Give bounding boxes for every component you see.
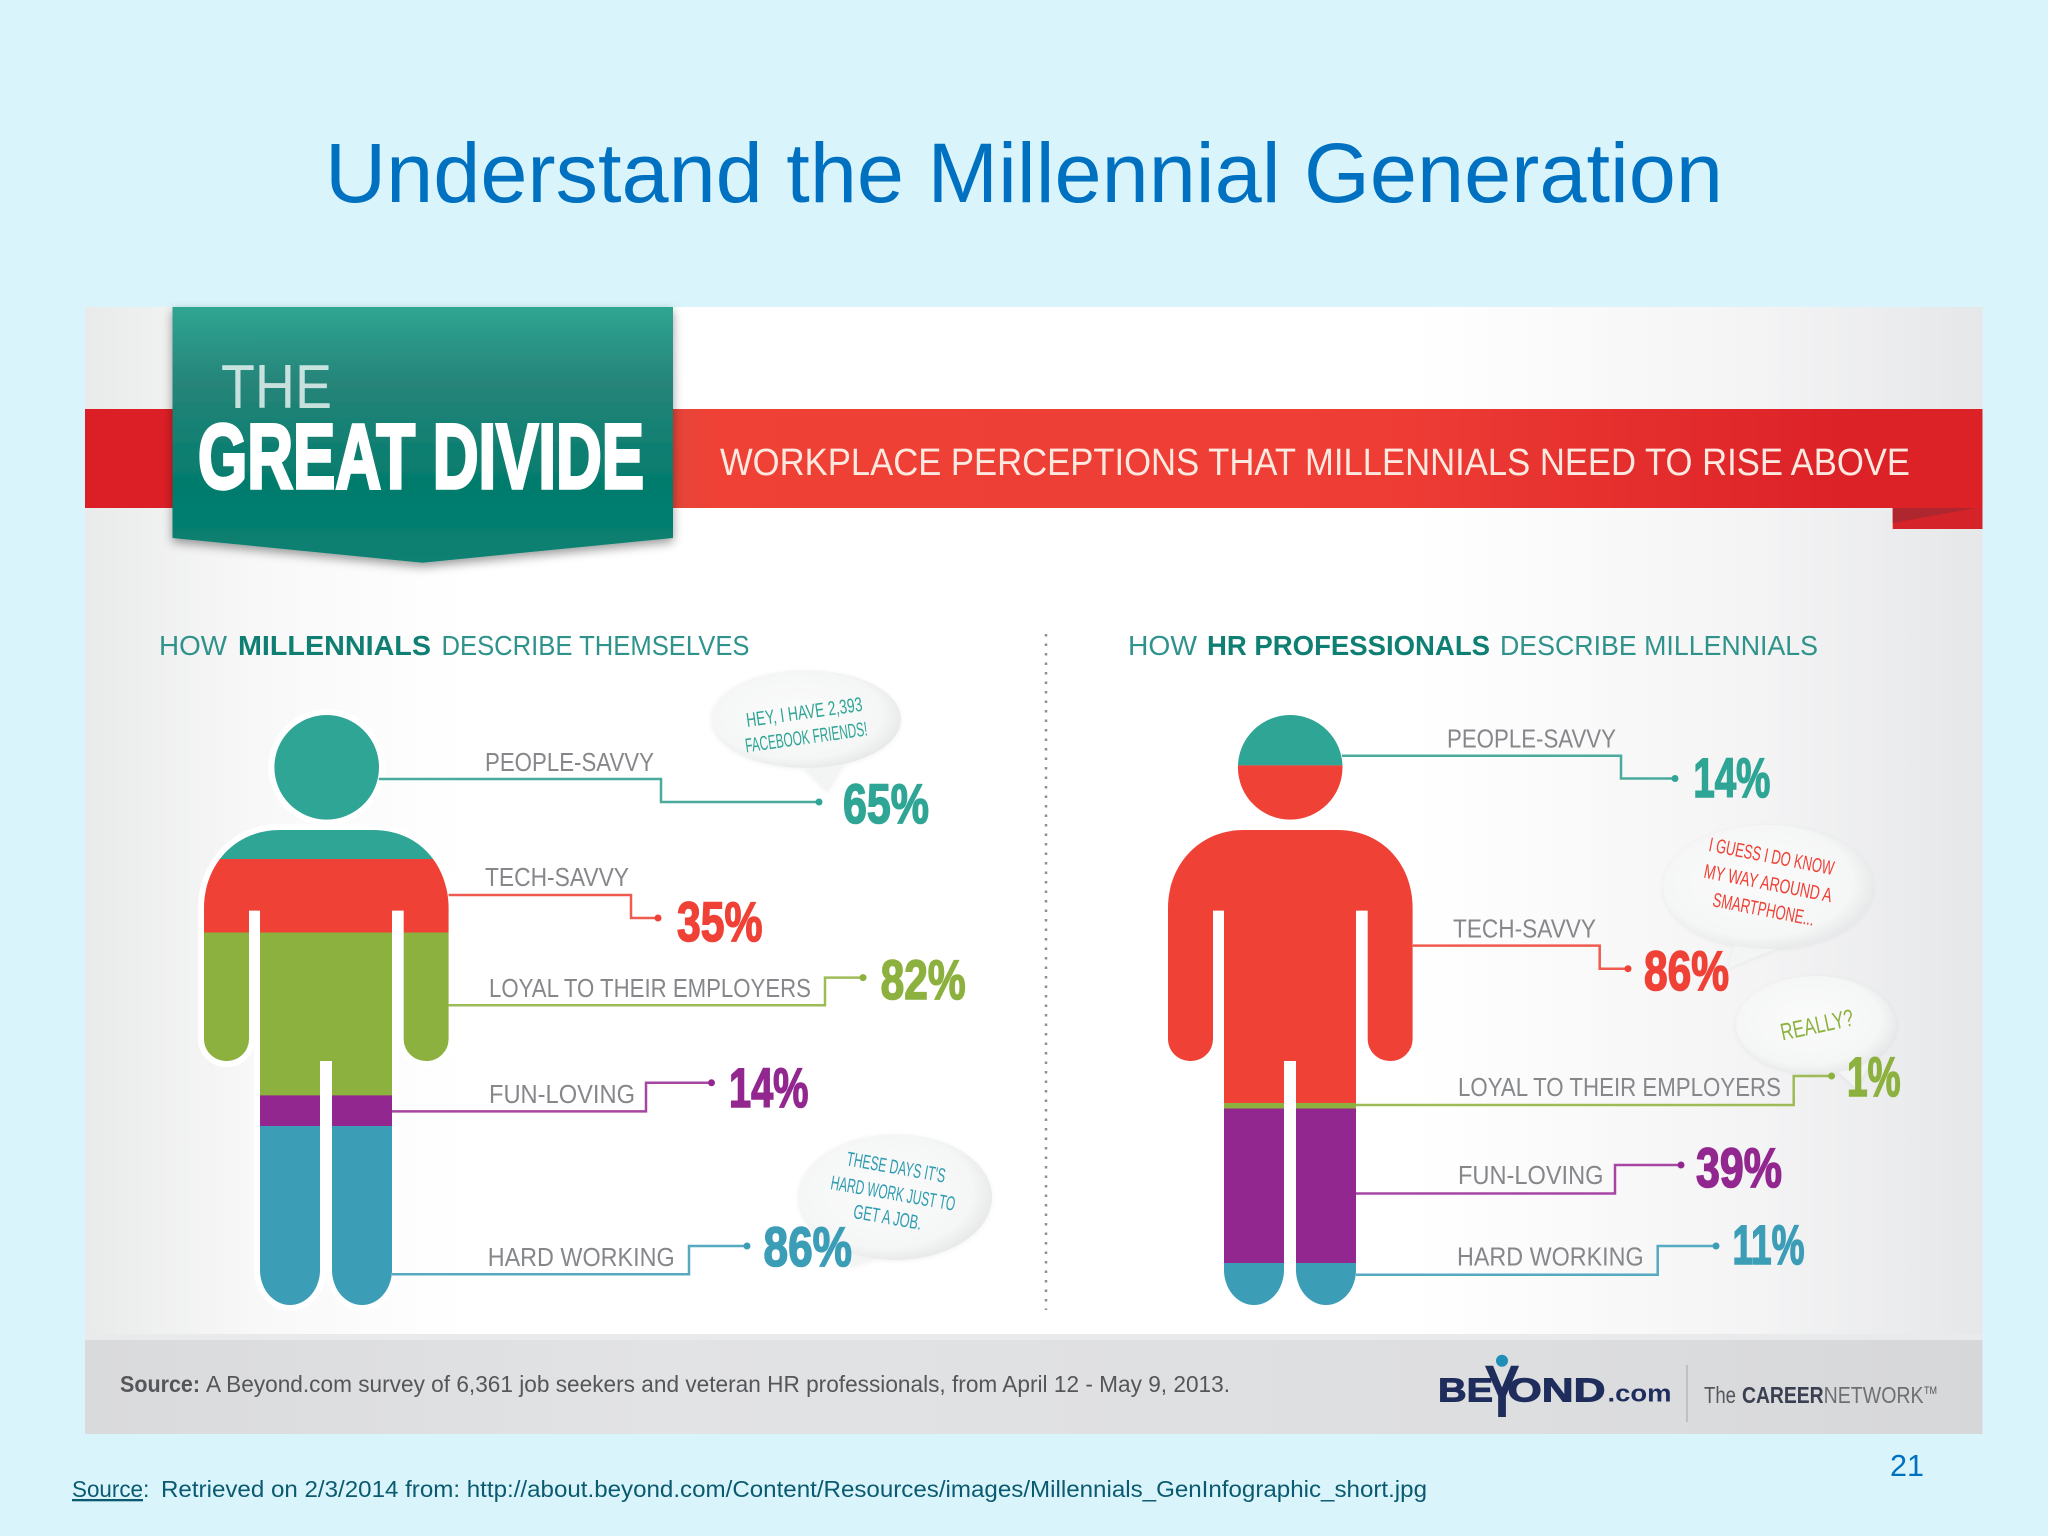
right metric: people-savvy [1342,723,1770,809]
right metric: hard working [1356,1213,1804,1276]
right metric: fun-loving: FUN-LOVING [1458,1160,1604,1190]
left metric: hard working [392,1215,852,1278]
tagline: the career network: CAREER [1742,1382,1824,1408]
heading: hr professionals: HOW [1128,630,1198,661]
right metric: fun-loving [1356,1136,1782,1199]
source line: Source [72,1476,143,1502]
left metric: people-savvy: PEOPLE-SAVVY [485,747,654,777]
left metric: tech-savvy: TECH-SAVVY [485,862,629,892]
page number: 21 [1890,1448,1924,1483]
right metric: tech-savvy: TECH-SAVVY [1453,914,1596,944]
tagline: the career network [1704,1382,1937,1408]
red ribbon [85,409,1982,529]
left metric: loyal [449,948,966,1011]
bubble: smartphone [1663,825,1873,968]
bubble: facebook friends: HEY, I HAVE 2,393 [745,694,864,732]
right metric: people-savvy: 14% [1693,746,1770,809]
right metric: tech-savvy: 86% [1644,939,1729,1002]
heading: millennials [159,630,750,661]
bubble: facebook friends: FACEBOOK FRIENDS! [744,718,869,757]
footer band [85,1334,1982,1434]
survey source: Source: [120,1371,200,1397]
right metric: loyal [1356,1045,1900,1108]
bubble: facebook friends [711,670,901,792]
left metric: loyal: 82% [881,948,966,1011]
bubble: smartphone: SMARTPHONE... [1711,889,1816,931]
logo: beyond.com: Y [1484,1350,1520,1433]
title: Understand the Millennial Generation [325,126,1723,220]
heading: millennials: DESCRIBE THEMSELVES [442,630,750,661]
left metric: hard working: HARD WORKING [488,1242,675,1272]
infographic panel [85,307,1982,1434]
heading: hr professionals: HR PROFESSIONALS [1207,630,1490,661]
heading: hr professionals: DESCRIBE MILLENNIALS [1500,630,1818,661]
tagline: the career network: TM [1924,1385,1937,1397]
right metric: people-savvy: PEOPLE-SAVVY [1447,723,1616,753]
logo: beyond.com [1438,1350,1672,1433]
right metric: loyal: 1% [1847,1045,1900,1108]
tagline: the career network: The [1704,1382,1736,1408]
bubble: really: REALLY? [1778,1005,1856,1046]
heading: millennials: MILLENNIALS [238,630,431,661]
left metric: loyal: LOYAL TO THEIR EMPLOYERS [489,973,811,1003]
banner word: the: THE [221,353,332,422]
source line: : [143,1476,149,1502]
logo: beyond.com: BE [1438,1372,1493,1409]
left metric: fun-loving: FUN-LOVING [489,1079,635,1109]
left metric: fun-loving: 14% [729,1056,808,1119]
bubble: hard work: THESE DAYS IT'S [845,1148,947,1188]
right figure [1168,715,1413,1305]
left metric: tech-savvy [449,862,762,953]
left metric: people-savvy: 65% [843,772,929,835]
bubble: really [1736,976,1896,1088]
left metric: fun-loving [392,1056,808,1119]
left metric: tech-savvy: 35% [677,890,762,953]
heading: millennials: HOW [159,630,228,661]
survey source: A Beyond.com survey of 6,361 job seekers and veteran HR professionals, from April 12 - May 9, 2013. [206,1371,1230,1397]
heading: hr professionals [1128,630,1818,661]
bubble: hard work: GET A JOB. [852,1201,923,1235]
right metric: hard working: HARD WORKING [1457,1241,1644,1271]
logo: beyond.com: OND [1508,1372,1606,1409]
right metric: hard working: 11% [1732,1213,1804,1276]
ribbon subtitle: WORKPLACE PERCEPTIONS THAT MILLENNIALS NEED TO RISE ABOVE [720,442,1910,484]
title banner [172,307,673,563]
left metric: people-savvy [379,747,929,835]
left figure [198,715,449,1305]
right metric: loyal: LOYAL TO THEIR EMPLOYERS [1458,1072,1781,1102]
bubble: hard work: HARD WORK JUST TO [829,1172,957,1216]
tagline: the career network: NETWORK [1824,1382,1924,1408]
source line: Retrieved on 2/3/2014 from: http://about.beyond.com/Content/Resources/images/Millennials_GenInfographic_short.jpg [161,1476,1427,1502]
right metric: tech-savvy [1413,914,1729,1002]
right metric: fun-loving: 39% [1696,1136,1782,1199]
logo: beyond.com: .com [1608,1381,1672,1408]
left metric: hard working: 86% [764,1215,852,1278]
bubble: smartphone: I GUESS I DO KNOW [1707,834,1836,880]
bubble: smartphone: MY WAY AROUND A [1702,861,1834,907]
banner heading: great divide: GREAT DIVIDE [198,406,644,508]
bubble: hard work [798,1134,992,1267]
